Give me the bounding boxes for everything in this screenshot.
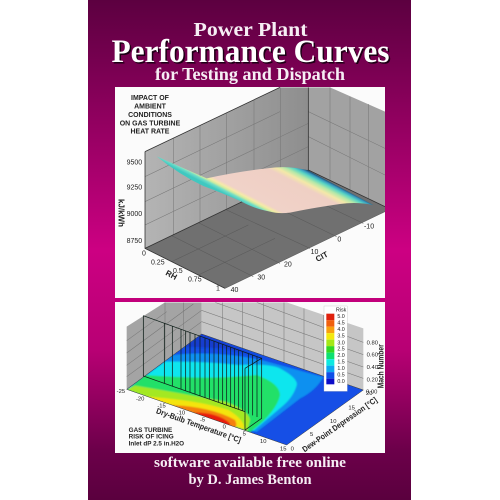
dew-point depression axis: 10	[330, 419, 337, 425]
software note: software available free online	[154, 455, 346, 471]
caption: risk of icing	[128, 428, 184, 446]
Mach number axis: 0.80	[367, 341, 379, 347]
heading: impact of ambient conditions: AMBIENT	[134, 103, 167, 110]
Mach number axis: 0.20	[367, 377, 379, 383]
vertical axis labels	[118, 160, 142, 243]
heading: impact of ambient conditions: CONDITIONS	[128, 112, 172, 119]
CIT axis labels: 30	[257, 274, 265, 281]
legend: 4.0	[337, 327, 345, 333]
dry-bulb temperature axis: 10	[260, 439, 267, 445]
dry-bulb temperature axis: 0	[223, 424, 227, 430]
legend: 4.5	[337, 321, 345, 327]
left wall	[127, 302, 202, 389]
subtitle: for Testing and Dispatch	[155, 64, 345, 84]
dry-bulb temperature axis: 5	[243, 431, 246, 437]
panel: heat rate surface chart	[115, 87, 385, 298]
legend: 1.0	[337, 366, 345, 372]
grid lines	[145, 87, 385, 288]
dry-bulb temperature axis: -20	[136, 396, 145, 402]
dry-bulb temperature axis: -15	[157, 404, 166, 410]
heading: impact of ambient conditions: ON GAS TURBINE	[120, 120, 181, 127]
legend: 2.0	[337, 353, 345, 359]
legend: 3.5	[337, 334, 345, 340]
RH axis labels	[142, 251, 220, 293]
dew-point depression axis: Dew-Point Depression [°C]	[301, 395, 379, 454]
RH axis labels: 0.25	[151, 259, 165, 266]
RH axis labels: RH	[164, 268, 179, 282]
right wall	[308, 87, 385, 207]
vertical axis labels: 9500	[127, 160, 142, 167]
Mach number axis: 0.00	[366, 389, 378, 395]
heading: impact of ambient conditions: HEAT RATE	[131, 129, 170, 136]
vertical axis labels: 9250	[127, 184, 142, 191]
CIT axis labels: -10	[364, 224, 374, 231]
legend: 5.0	[337, 314, 345, 320]
floor	[145, 170, 385, 288]
Mach number axis	[366, 340, 384, 394]
dry-bulb temperature axis: -5	[200, 417, 205, 423]
left wall	[145, 87, 308, 248]
dew-point depression axis: 5	[310, 432, 313, 438]
panel: icing risk contour chart	[115, 302, 386, 454]
CIT axis labels: 10	[311, 249, 319, 256]
legend	[324, 306, 347, 391]
dry-bulb temperature axis: -25	[117, 389, 125, 395]
dry-bulb temperature axis: Dry-Bulb Temperature [°C]	[155, 406, 242, 445]
vertical axis labels: 9000	[127, 211, 142, 218]
RH axis labels: 0	[142, 251, 146, 258]
vertical axis labels: kJ/kWh	[116, 199, 125, 227]
legend: 3.0	[337, 340, 345, 346]
CIT axis labels: CIT	[314, 250, 330, 264]
book cover background	[88, 0, 411, 500]
CIT axis labels: 0	[337, 236, 341, 243]
legend: 1.5	[337, 360, 345, 366]
Mach number axis: 0.40	[367, 365, 379, 371]
author: by D. James Benton	[188, 472, 312, 488]
legend: 0.5	[337, 373, 345, 379]
back wall	[202, 302, 363, 390]
floor edges	[127, 334, 363, 445]
vertical axis labels: 8750	[127, 238, 142, 245]
RH axis labels: 0.5	[173, 268, 183, 275]
vertical slice bars	[143, 316, 262, 430]
dew-point depression axis: 15	[348, 405, 355, 411]
legend: Risk	[336, 308, 347, 314]
heading: impact of ambient conditions: IMPACT OF	[131, 95, 170, 102]
dew-point depression axis: 0	[291, 446, 295, 452]
darker blue back corner	[185, 334, 260, 357]
footer text	[154, 455, 346, 488]
RH axis labels: 1	[216, 286, 220, 293]
RH axis labels: 0.75	[188, 277, 202, 284]
dry-bulb temperature axis: -10	[177, 410, 186, 416]
CIT axis labels: 40	[231, 287, 239, 294]
caption: risk of icing: Inlet dP 2.5 in.H2O	[129, 440, 184, 447]
legend: 2.5	[337, 347, 345, 353]
title line: Power Plant: Power Plant	[194, 20, 308, 41]
CIT axis labels	[231, 224, 374, 294]
Mach number axis: Mach Number	[377, 344, 386, 388]
dry-bulb temperature axis	[117, 389, 286, 452]
title line: Performance Curves: Performance Curves	[113, 36, 391, 72]
dew-point depression axis: 20	[366, 391, 373, 397]
contour floor	[123, 334, 363, 445]
legend: 0.0	[337, 379, 345, 385]
dry-bulb temperature axis: 15	[280, 446, 286, 452]
surface sheet	[157, 156, 373, 213]
heading: impact of ambient conditions	[120, 95, 181, 136]
title line: Performance Curves: Performance Curves	[112, 34, 390, 70]
title	[112, 20, 391, 84]
caption: risk of icing: GAS TURBINE	[129, 427, 172, 434]
caption: risk of icing: RISK OF ICING	[129, 434, 174, 441]
CIT axis labels: 20	[284, 262, 292, 269]
Mach number axis: 0.60	[367, 352, 379, 358]
